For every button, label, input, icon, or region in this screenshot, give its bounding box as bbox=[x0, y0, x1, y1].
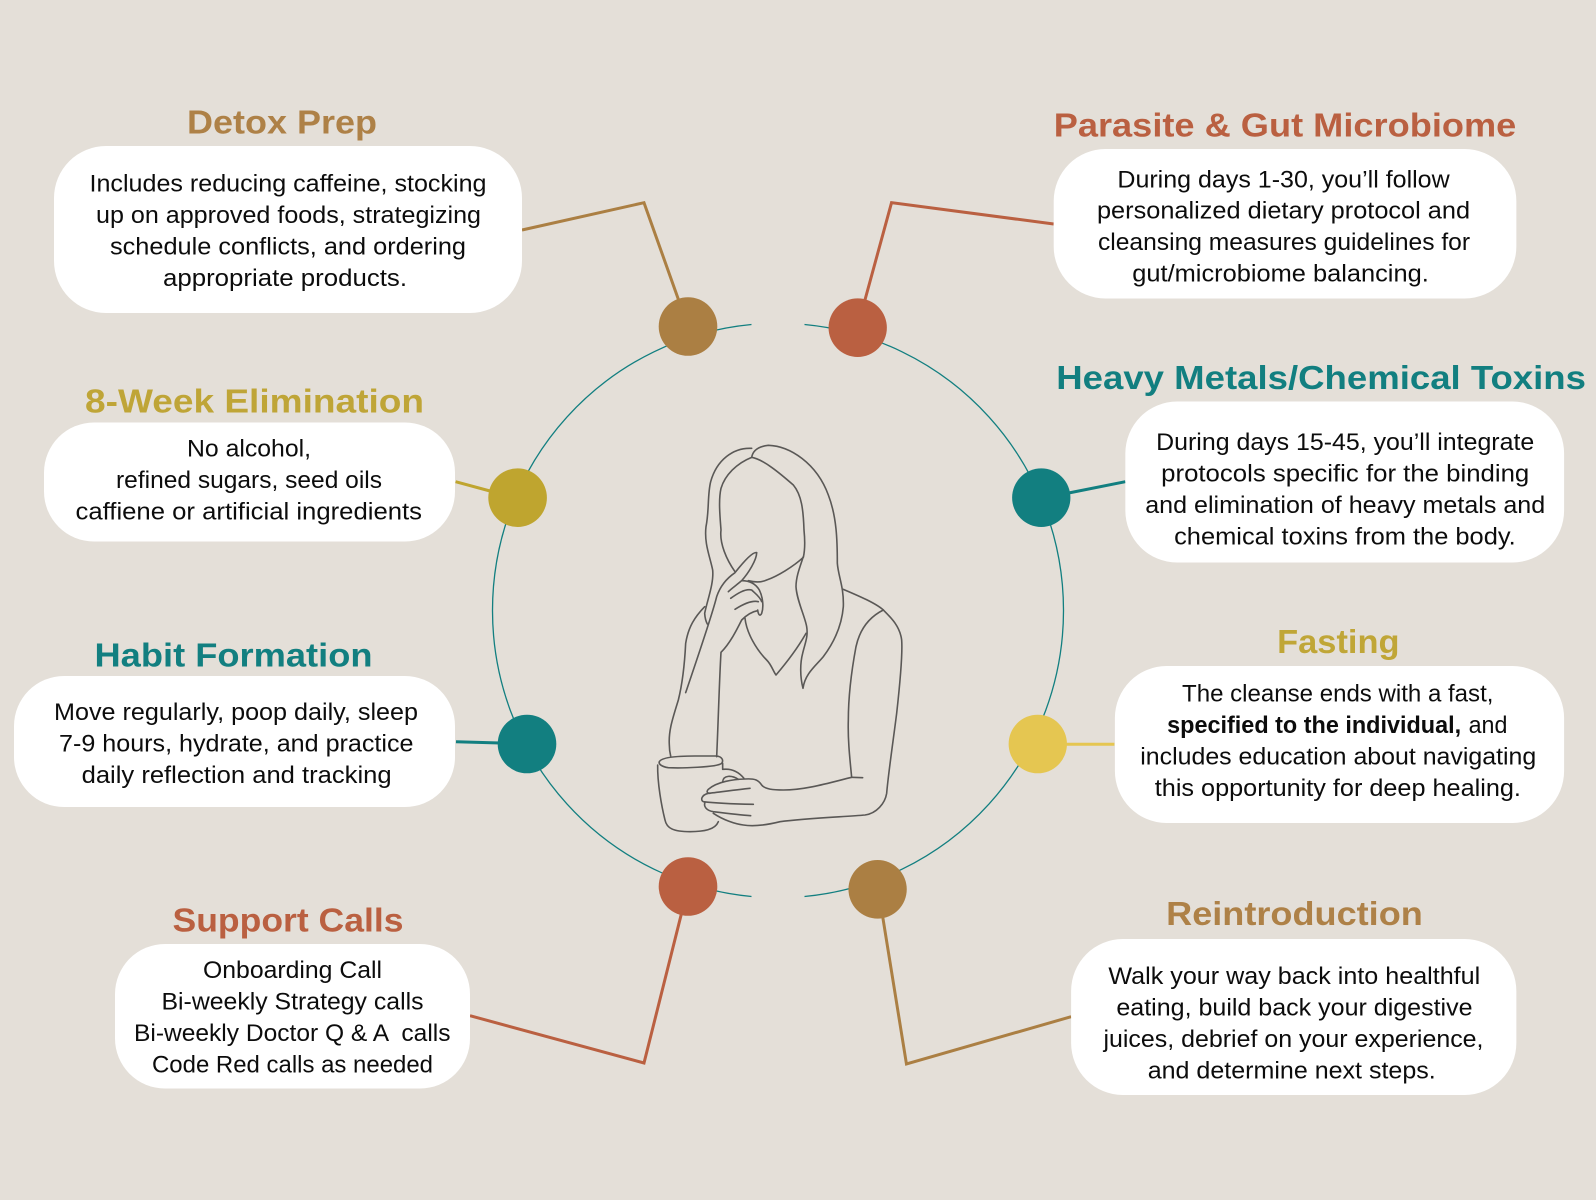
connector bbox=[1069, 482, 1125, 493]
heading: Detox Prep bbox=[187, 104, 377, 142]
body text: personalized dietary protocol and bbox=[1097, 198, 1470, 225]
central ring bbox=[492, 324, 1064, 896]
connector bbox=[865, 203, 1054, 301]
node bbox=[659, 297, 717, 356]
body text: up on approved foods, strategizing bbox=[96, 202, 481, 229]
body text: During days 1-30, you’ll follow bbox=[1117, 166, 1450, 194]
body text: chemical toxins from the body. bbox=[1174, 523, 1516, 551]
heading: Fasting bbox=[1277, 624, 1400, 661]
node bbox=[498, 715, 556, 773]
node bbox=[829, 298, 887, 357]
body text: 7-9 hours, hydrate, and practice bbox=[59, 730, 414, 758]
panel: Reintroduction bbox=[848, 860, 1516, 1095]
panel: Fasting bbox=[1009, 624, 1564, 823]
heading: Habit Formation bbox=[94, 638, 372, 674]
panel: 8-Week Elimination bbox=[44, 384, 547, 542]
card bbox=[1054, 149, 1516, 298]
body text: Walk your way back into healthful bbox=[1108, 963, 1480, 990]
body text: appropriate products. bbox=[163, 265, 407, 292]
body text bbox=[134, 957, 450, 1078]
panel: Heavy Metals/Chemical Toxins bbox=[1012, 360, 1586, 562]
body text: and elimination of heavy metals and bbox=[1145, 492, 1545, 519]
panel: Habit Formation bbox=[14, 638, 556, 807]
body text bbox=[76, 436, 422, 526]
card bbox=[1071, 939, 1516, 1095]
connector bbox=[1066, 743, 1114, 746]
node bbox=[659, 857, 717, 916]
body text: and bbox=[1469, 712, 1507, 739]
card bbox=[14, 676, 455, 807]
node bbox=[1009, 715, 1067, 773]
panel: Support Calls bbox=[115, 857, 717, 1088]
body text bbox=[1145, 429, 1545, 551]
body text: Code Red calls as needed bbox=[152, 1052, 433, 1078]
body text: gut/microbiome balancing. bbox=[1132, 260, 1429, 288]
body text: Includes reducing caffeine, stocking bbox=[90, 170, 486, 198]
heading: Heavy Metals/Chemical Toxins bbox=[1056, 360, 1586, 397]
heading: 8-Week Elimination bbox=[85, 384, 424, 420]
connector bbox=[522, 203, 679, 300]
body text: Move regularly, poop daily, sleep bbox=[54, 699, 418, 726]
heading: Support Calls bbox=[172, 902, 404, 940]
body text: and determine next steps. bbox=[1148, 1057, 1436, 1085]
body text bbox=[1140, 680, 1536, 802]
card bbox=[115, 944, 470, 1088]
body text: schedule conflicts, and ordering bbox=[110, 234, 466, 260]
card bbox=[1115, 666, 1564, 823]
heading: Reintroduction bbox=[1166, 896, 1423, 933]
body text: During days 15-45, you’ll integrate bbox=[1156, 429, 1534, 456]
connector bbox=[883, 916, 1071, 1064]
body text: Onboarding Call bbox=[203, 957, 382, 984]
connector bbox=[470, 913, 682, 1063]
illustration: woman thinking with a mug bbox=[658, 445, 902, 832]
card bbox=[44, 422, 455, 542]
panel: Parasite & Gut Microbiome bbox=[829, 107, 1516, 357]
card bbox=[1125, 402, 1564, 562]
node bbox=[848, 860, 907, 919]
body text: specified to the individual, bbox=[1167, 712, 1461, 739]
body text bbox=[54, 699, 418, 789]
body text: caffiene or artificial ingredients bbox=[76, 498, 422, 526]
body text: protocols specific for the binding bbox=[1161, 460, 1529, 488]
node bbox=[1012, 468, 1070, 527]
body text: daily reflection and tracking bbox=[82, 762, 392, 789]
body text bbox=[90, 170, 486, 292]
body text: Bi-weekly Doctor Q & A calls bbox=[134, 1020, 450, 1047]
connector bbox=[456, 482, 490, 491]
card bbox=[54, 146, 522, 313]
body text: juices, debrief on your experience, bbox=[1102, 1026, 1484, 1053]
connector bbox=[456, 742, 500, 743]
body text bbox=[1102, 963, 1484, 1085]
body text: eating, build back your digestive bbox=[1116, 994, 1473, 1022]
body text: this opportunity for deep healing. bbox=[1155, 775, 1521, 802]
body text: The cleanse ends with a fast, bbox=[1182, 680, 1493, 708]
node bbox=[488, 468, 547, 527]
heading: Parasite & Gut Microbiome bbox=[1054, 107, 1516, 145]
body text: includes education about navigating bbox=[1140, 743, 1536, 771]
body text bbox=[1097, 166, 1470, 288]
body text: Bi-weekly Strategy calls bbox=[162, 988, 424, 1016]
body text: refined sugars, seed oils bbox=[116, 467, 382, 494]
body text: cleansing measures guidelines for bbox=[1098, 229, 1470, 256]
panel: Detox Prep bbox=[54, 104, 717, 356]
body text: No alcohol, bbox=[187, 436, 311, 462]
